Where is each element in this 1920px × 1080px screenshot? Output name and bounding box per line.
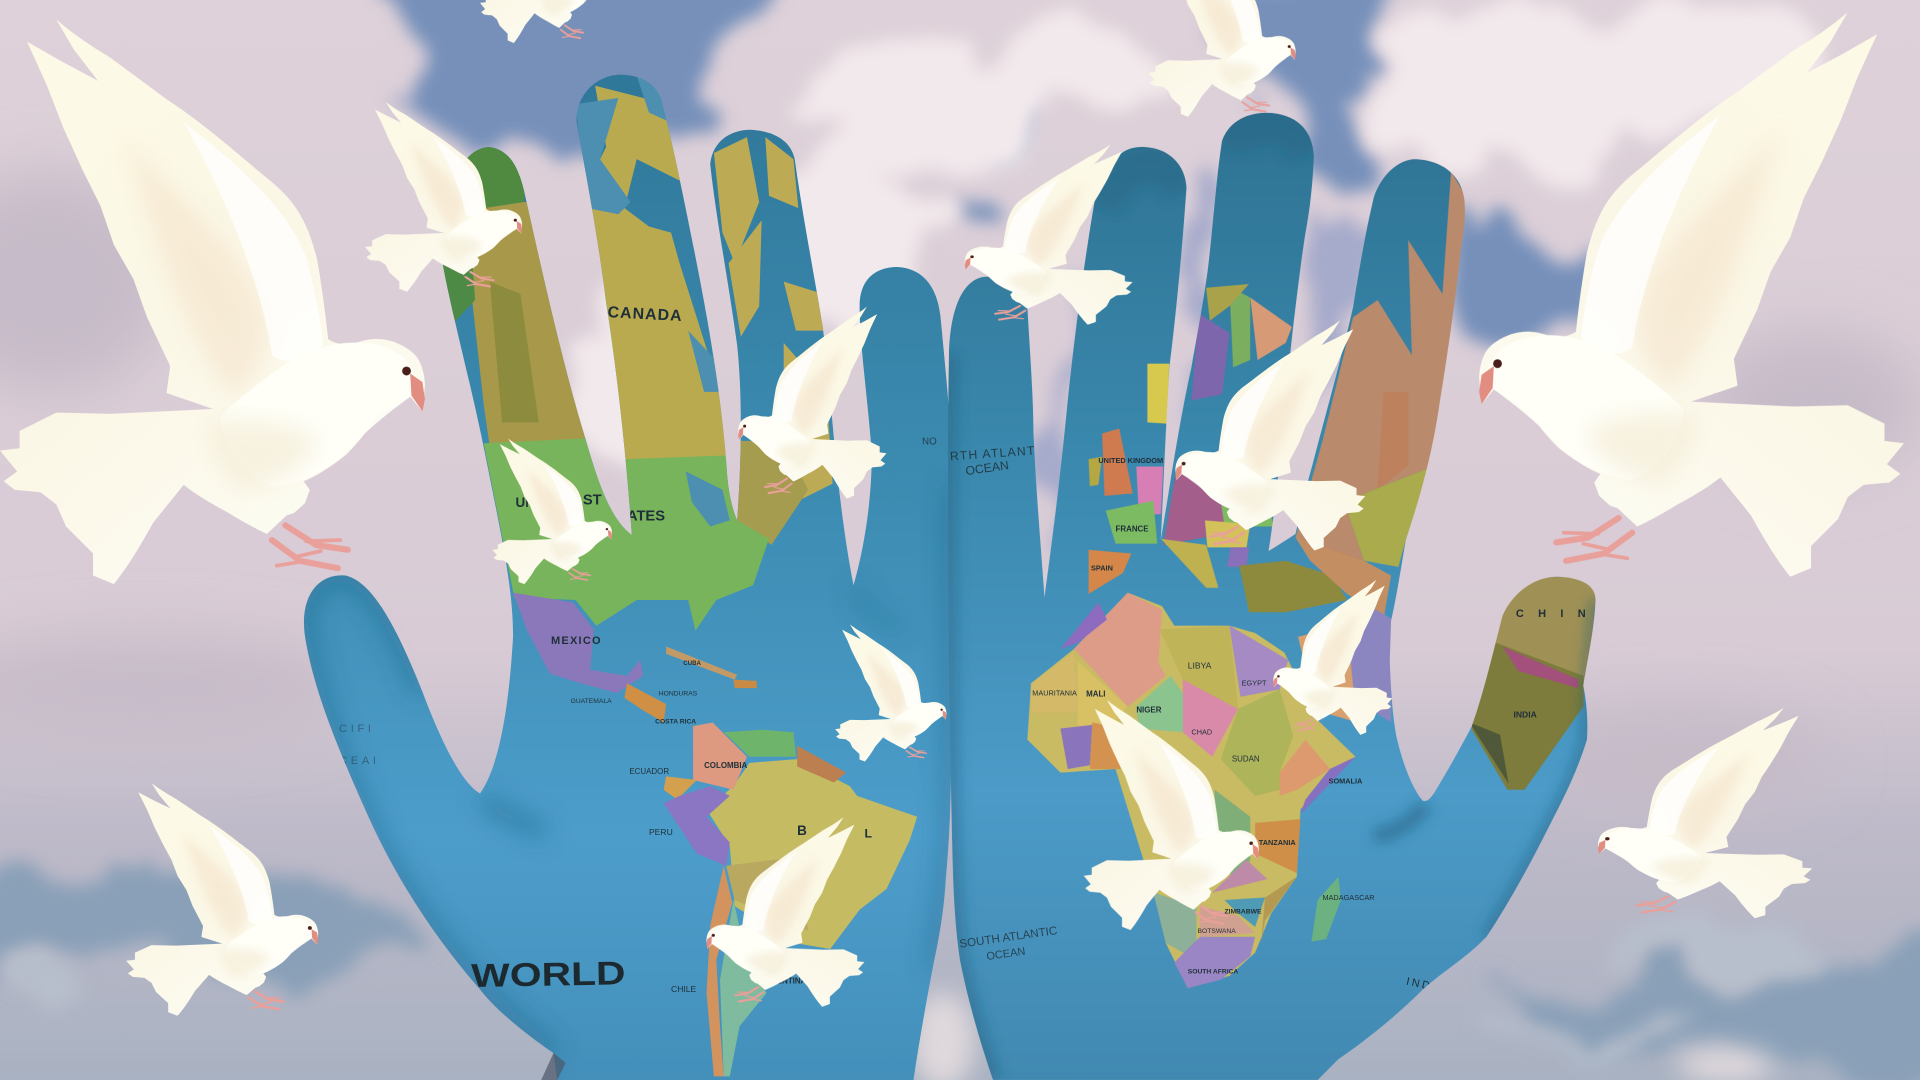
right hand map labels: SOUTH ATLANTIC [959,924,1058,951]
left hand map labels: MEXICO [551,635,602,647]
right hand [943,104,1604,1080]
right hand map labels: SUDAN [1232,755,1260,764]
label: WORLD: WORLD [471,955,626,995]
right hand map labels: MADAGASCAR [1322,893,1375,902]
right hand map labels: EGYPT [1242,679,1267,688]
right hand map labels: NIGER [1136,706,1162,715]
pinky map: Alaska and Yukon [435,141,588,447]
left palm creases and shading [304,490,953,1053]
right hand map labels: INDIA [1513,710,1537,720]
map: Mexico and Central America [513,593,643,693]
map: Africa [1027,593,1356,988]
right hand map labels: FRANCE [1116,524,1149,533]
dove: top edge left [480,0,606,43]
left hand map labels: COLOMBIA [704,761,748,770]
dove: on West Africa [1084,700,1259,930]
left hand map labels: L [864,827,872,841]
dove: on Europe [1175,320,1365,551]
left hand map labels: NO [922,436,937,447]
left hand map labels: GUATEMALA [571,698,612,705]
dove: lower right [1598,708,1812,918]
map: Caribbean [666,647,737,680]
right hand map labels: MAURITANIA [1032,689,1077,698]
dove: on middle finger [738,307,887,499]
left hand map labels: ST [583,492,602,508]
right hand map labels: INDI [1405,976,1439,994]
ring finger map: Scandinavia [1191,284,1292,400]
left hand map labels: COSTA RICA [655,719,696,726]
dove: on East Africa [1273,580,1392,735]
right hand skin [943,104,1604,1080]
left hand map labels: B [797,823,807,838]
left hand skin [294,61,961,1080]
map: Kazakhstan [1347,467,1433,567]
arm behind left hand [541,1053,566,1080]
right hand map labels: MALI [1086,690,1106,699]
right hand map labels: OCEAN [965,458,1010,478]
map: Madagascar [1311,877,1341,942]
dove: large right [1479,12,1904,577]
ring finger map: Canada [576,76,730,465]
dove: large left [0,20,425,584]
left hand map labels: CUBA [683,660,702,667]
map: Turkey and Middle East [1239,561,1347,612]
map: South America [664,722,917,1076]
dove: top edge right [1149,0,1296,117]
dove: on left pinky [365,102,522,292]
right hand map labels: ZIMBABWE [1224,908,1262,915]
dove: lower left [126,783,318,1016]
map: Iran and Arabia [1341,600,1391,722]
right hand map labels: SPAIN [1091,564,1113,573]
right hand map labels: RTH ATLANTI [949,443,1041,463]
left hand map labels: CEAI [339,755,380,767]
right hand map labels: CHIN [1516,608,1592,620]
right hand map labels: CHAD [1191,728,1212,737]
left hand map labels [339,304,937,995]
right hand map labels: LIBYA [1188,661,1212,671]
middle finger map: Baffin and Greenland [714,137,833,545]
left hand map labels: CHILE [671,984,697,994]
left hand map labels: ECUADOR [629,767,669,776]
dove: on United States [492,439,612,584]
left hand map labels: HONDURAS [659,691,698,698]
right hand map labels [949,443,1592,994]
right hand map labels: SOMALIA [1329,777,1363,786]
left hand map labels: ARGENTINA [759,976,807,985]
dove: on right middle finger [965,145,1133,325]
thumb map: China and India [1469,577,1598,790]
left hand map labels: CANADA [607,304,684,325]
map: Europe [1089,460,1273,594]
middle finger map: Iceland and UK [1089,364,1169,544]
left hand map labels: CIFI [339,723,375,735]
left hand map labels: PERU [649,827,673,837]
right hand map labels: UNITED KINGDOM [1098,456,1163,465]
left hand [294,61,961,1080]
pinky map: Russia [1296,171,1469,561]
left hand map labels: ATES [627,508,665,524]
map: United States [484,438,769,631]
right hand map labels: SOUTH AFRICA [1188,968,1238,975]
left hand map labels: UNITED [516,495,566,510]
right hand map labels: OCEAN [986,946,1026,963]
dove: right of Caribbean [835,624,946,762]
right hand map labels: BOTSWANA [1198,928,1236,935]
dove: on South America [706,817,864,1007]
right hand fingertip and crease shading [948,125,1596,1080]
right hand map labels: TANZANIA [1259,838,1296,847]
